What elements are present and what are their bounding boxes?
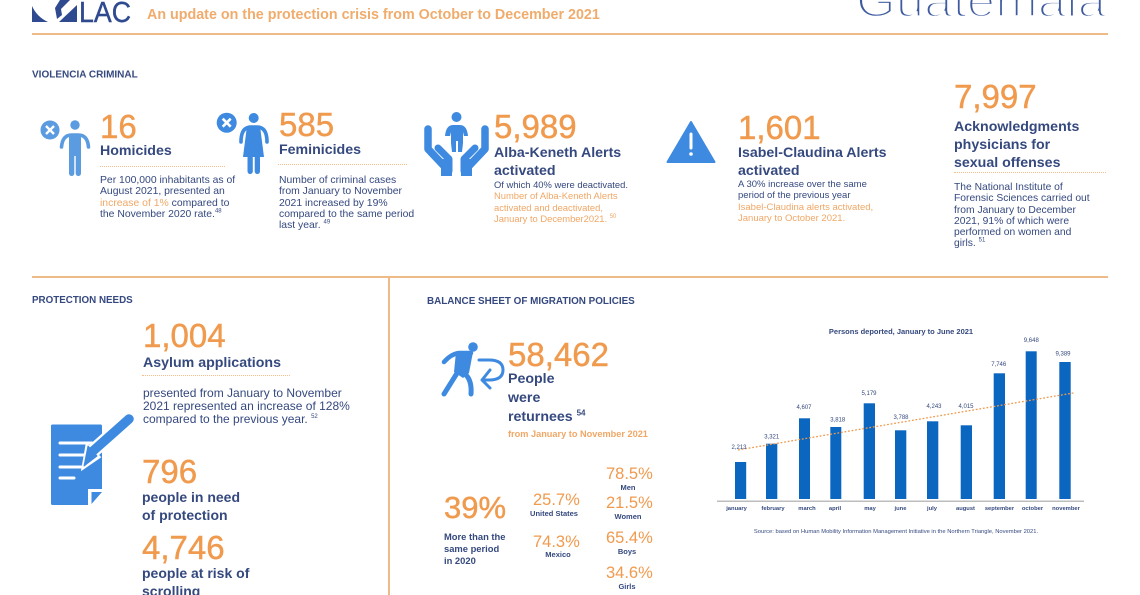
stat: boys: Boys bbox=[618, 547, 636, 556]
stat: boys bbox=[606, 529, 653, 556]
section rule bbox=[32, 276, 1108, 278]
number: 585 bbox=[279, 106, 334, 143]
stat: women bbox=[606, 494, 653, 521]
value labels: 4,243 bbox=[926, 404, 942, 410]
number: 796 bbox=[142, 453, 197, 490]
divider bbox=[142, 375, 290, 376]
label: people in need bbox=[142, 489, 240, 505]
label: of protection bbox=[142, 507, 228, 523]
icon: returning person bbox=[442, 342, 504, 396]
icon: document and pen bbox=[51, 414, 134, 505]
description bbox=[279, 175, 414, 231]
description: Number of criminal cases bbox=[279, 175, 396, 186]
icon: warning triangle bbox=[666, 121, 716, 163]
label: physicians for bbox=[954, 137, 1050, 153]
number: 1,601 bbox=[738, 109, 821, 146]
description: 2021 increased by 19% bbox=[279, 198, 388, 209]
label bbox=[494, 145, 621, 179]
value labels: 3,321 bbox=[764, 434, 780, 440]
column rule bbox=[388, 277, 390, 595]
month labels: july bbox=[926, 506, 938, 512]
description: 2021 represented an increase of 128% bbox=[143, 398, 350, 412]
description bbox=[738, 179, 873, 224]
divider bbox=[954, 172, 1106, 173]
description: A 30% increase over the same bbox=[738, 179, 867, 190]
label bbox=[954, 119, 1079, 171]
month labels: june bbox=[894, 506, 907, 512]
month labels: september bbox=[985, 506, 1015, 512]
label: activated bbox=[738, 163, 800, 179]
logo bbox=[32, 0, 131, 24]
label: returnees 54 bbox=[508, 408, 586, 425]
label: Homicides bbox=[100, 143, 172, 159]
heading: PROTECTION NEEDS bbox=[32, 295, 133, 306]
description: girls. 51 bbox=[954, 238, 985, 249]
heading: criminal violence: VIOLENCIA CRIMINAL bbox=[32, 70, 138, 80]
description: Number of Alba-Keneth Alerts bbox=[494, 190, 618, 201]
label: People bbox=[508, 371, 555, 387]
label: Feminicides bbox=[279, 142, 361, 158]
description: from January to November bbox=[279, 186, 402, 197]
description: performed on women and bbox=[954, 227, 1071, 238]
description: from January to December bbox=[954, 205, 1076, 216]
bars bbox=[735, 351, 1071, 499]
stat: men: Men bbox=[620, 483, 636, 492]
divider bbox=[278, 164, 407, 165]
icon: woman with x bbox=[216, 112, 269, 174]
month labels: october bbox=[1022, 506, 1044, 512]
panel: feminicides bbox=[216, 106, 414, 231]
description: Of which 40% were deactivated. bbox=[494, 179, 628, 190]
description: August 2021, presented an bbox=[100, 186, 225, 197]
description: in 2020 bbox=[444, 555, 476, 566]
description bbox=[143, 386, 350, 426]
description: 2021, 91% of which were bbox=[954, 216, 1069, 227]
label bbox=[142, 565, 250, 595]
description: same period bbox=[444, 543, 499, 554]
label: Isabel-Claudina Alerts bbox=[738, 145, 886, 161]
stat: Mexico: Mexico bbox=[545, 550, 571, 559]
stat: United States bbox=[530, 491, 580, 518]
header rule bbox=[32, 33, 1108, 35]
stat: United States: United States bbox=[530, 509, 578, 518]
label: were bbox=[508, 390, 540, 406]
description bbox=[954, 182, 1090, 249]
value labels: 4,015 bbox=[958, 404, 974, 410]
panel: physician acknowledgments bbox=[954, 78, 1106, 249]
stat: Mexico bbox=[533, 533, 580, 559]
description bbox=[444, 531, 506, 566]
panel: Alba-Keneth alerts bbox=[424, 108, 628, 224]
axis bbox=[717, 500, 1084, 502]
label: Acknowledgments bbox=[954, 119, 1079, 135]
description: Isabel-Claudina alerts activated, bbox=[738, 202, 873, 213]
description bbox=[100, 175, 236, 220]
label: Alba-Keneth Alerts bbox=[494, 145, 621, 161]
month labels bbox=[725, 506, 1081, 512]
value labels: 7,746 bbox=[991, 362, 1007, 368]
value labels: 5,179 bbox=[861, 391, 877, 397]
stat: men: 78.5% bbox=[606, 465, 653, 483]
chart title: Persons deported, January to June 2021 bbox=[829, 327, 973, 336]
stat: United States: 25.7% bbox=[533, 491, 580, 509]
description: compared to the previous year. 52 bbox=[143, 412, 318, 426]
description: increase of 1% compared to bbox=[100, 198, 229, 209]
number: 4,746 bbox=[142, 529, 225, 566]
number: 7,997 bbox=[954, 78, 1037, 115]
bar chart: persons deported bbox=[717, 327, 1084, 535]
panel: Isabel-Claudina alerts bbox=[666, 109, 886, 224]
number: 39% bbox=[444, 490, 506, 525]
description bbox=[494, 179, 628, 224]
stat: boys: 65.4% bbox=[606, 529, 653, 547]
value labels bbox=[731, 338, 1071, 451]
label: people at risk of bbox=[142, 565, 249, 581]
description: the November 2020 rate.48 bbox=[100, 208, 222, 220]
stat: Mexico: 74.3% bbox=[533, 533, 580, 551]
panel: homicides bbox=[40, 108, 236, 220]
icon: hands holding child bbox=[424, 112, 489, 176]
description: January to December2021. 50 bbox=[494, 213, 616, 224]
value labels: 9,389 bbox=[1055, 352, 1071, 358]
number: 1,004 bbox=[143, 317, 226, 354]
panel: protection needs bbox=[32, 295, 350, 595]
value labels: 3,818 bbox=[830, 418, 846, 424]
description: presented from January to November bbox=[143, 386, 342, 400]
label bbox=[508, 371, 586, 425]
month labels: january bbox=[725, 506, 748, 512]
description: The National Institute of bbox=[954, 182, 1063, 193]
label: Asylum applications bbox=[143, 355, 281, 371]
label bbox=[142, 489, 240, 523]
description: Forensic Sciences carried out bbox=[954, 193, 1090, 204]
value labels: 9,648 bbox=[1024, 338, 1039, 344]
description: compared to the same period bbox=[279, 209, 414, 220]
number: 16 bbox=[100, 108, 137, 145]
description: Per 100,000 inhabitants as of bbox=[100, 175, 235, 186]
month labels: march bbox=[798, 506, 816, 512]
value labels: 4,607 bbox=[796, 405, 812, 411]
description: period of the previous year bbox=[738, 190, 850, 201]
month labels: november bbox=[1052, 506, 1081, 512]
trend line bbox=[738, 393, 1075, 450]
icon: man with x bbox=[40, 120, 90, 176]
panel: migration policies bbox=[427, 296, 653, 591]
description: last year. 49 bbox=[279, 220, 330, 231]
number: 5,989 bbox=[494, 108, 577, 145]
stat: girls: Girls bbox=[618, 582, 636, 591]
label: activated bbox=[494, 163, 556, 179]
date note: from January to November 2021 bbox=[508, 428, 648, 438]
stat: men bbox=[606, 465, 653, 492]
description: activated and deactivated, bbox=[494, 202, 603, 213]
stat: women: Women bbox=[615, 512, 641, 521]
month labels: february bbox=[761, 506, 785, 512]
value labels: 3,788 bbox=[893, 415, 909, 421]
month labels: april bbox=[829, 506, 842, 512]
month labels: august bbox=[956, 506, 975, 512]
stat: girls bbox=[606, 564, 653, 591]
divider bbox=[100, 166, 225, 167]
value labels: 2,213 bbox=[731, 445, 747, 451]
stat: women: 21.5% bbox=[606, 494, 653, 512]
description: January to October 2021. bbox=[738, 213, 845, 224]
description: More than the bbox=[444, 531, 505, 542]
label: sexual offenses bbox=[954, 155, 1060, 171]
source note: Source: based on Human Mobility Information Management Initiative in the Northern Triangle, November 2021. bbox=[754, 529, 1038, 535]
stat: girls: 34.6% bbox=[606, 564, 653, 582]
number: 58,462 bbox=[508, 336, 609, 373]
subtitle: An update on the protection crisis from October to December 2021 bbox=[147, 7, 600, 23]
label bbox=[738, 145, 886, 179]
month labels: may bbox=[864, 506, 877, 512]
heading: BALANCE SHEET OF MIGRATION POLICIES bbox=[427, 296, 635, 307]
